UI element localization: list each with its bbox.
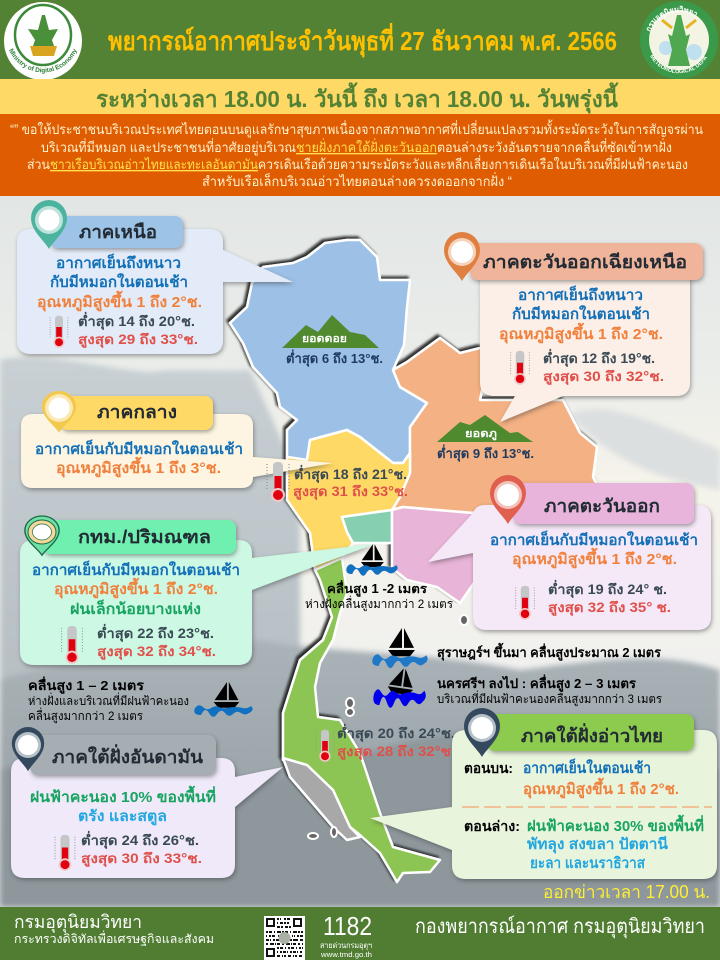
icon: pin Gulf xyxy=(464,708,500,757)
panel: north: สูงสุด 29 ถึง 33°ช. xyxy=(78,332,198,348)
logo: meteorological department xyxy=(640,1,718,79)
region: northeast xyxy=(392,338,597,513)
warning panel: ตอนล่างระวังอันตรายจากคลื่นที่ซัดเข้าหาฝั่ง xyxy=(437,138,672,155)
central temperatures xyxy=(267,462,408,502)
wave note: Surat xyxy=(372,628,661,668)
panel: northeast xyxy=(444,232,703,422)
icon: pin northeast xyxy=(444,232,480,281)
region: north xyxy=(230,240,427,463)
map of Thailand xyxy=(230,240,597,882)
south temperatures: สูงสุด 28 ถึง 32°ช. xyxy=(337,744,455,760)
icon: pin central xyxy=(42,391,76,433)
wave note: upper gulf xyxy=(305,544,454,612)
panel: northeast: อุณหภูมิสูงขึ้น 1 ถึง 2°ช. xyxy=(499,322,663,344)
panel: east: อุณหภูมิสูงขึ้น 1 ถึง 2°ช. xyxy=(512,547,677,569)
logo: meteorological department: กรมอุตุนิยมวิทยา xyxy=(646,6,697,32)
panel: east: ภาคตะวันออก xyxy=(544,496,660,516)
panel: Gulf coast: ตอนล่าง: xyxy=(464,818,520,834)
panel: central: ภาคกลาง xyxy=(97,402,177,422)
mountain: Phu peak xyxy=(437,415,534,462)
footer: สายด่วนกรมอุตุฯ xyxy=(320,941,372,950)
panel: Gulf coast: ภาคใต้ฝั่งอ่าวไทย xyxy=(521,723,663,746)
panel: Bangkok and vicinity: สูงสุด 32 ถึง 34°ช. xyxy=(97,644,216,660)
panel: north: ภาคเหนือ xyxy=(79,222,157,242)
mountain: Doi peak xyxy=(282,315,383,367)
region: Andaman coast xyxy=(283,758,360,840)
panel: Bangkok and vicinity: อากาศเย็นกับมีหมอกในตอนเช้า xyxy=(32,560,240,579)
background: misty mountains xyxy=(0,195,720,907)
footer: กระทรวงดิจิทัลเพื่อเศรษฐกิจและสังคม xyxy=(14,930,214,946)
wave note: Nakhon Si Thammarat: นครศรีฯ ลงไป : คลื่นสูง 2 – 3 เมตร xyxy=(437,674,636,692)
panel: east: ต่ำสุด 19 ถึง 24° ช. xyxy=(548,579,667,598)
wave note: upper gulf: ห่างฝั่งคลื่นสูงมากกว่า 2 เมตร xyxy=(305,595,454,612)
warning panel: บริเวณที่มีหมอก และประชาชนที่อาศัยอยู่บริเวณ xyxy=(41,138,296,156)
mountain: Doi peak: ยอดดอย xyxy=(302,333,347,345)
panel: northeast: กับมีหมอกในตอนเช้า xyxy=(512,305,650,323)
mountain: Phu peak: ต่ำสุด 9 ถึง 13°ช. xyxy=(437,444,534,462)
panel: Gulf coast: อุณหภูมิสูงขึ้น 1 ถึง 2°ช. xyxy=(523,777,679,799)
panel: north: ต่ำสุด 14 ถึง 20°ช. xyxy=(78,311,195,330)
region: south xyxy=(283,558,440,882)
wave note: west coast: ห่างฝั่งและบริเวณที่มีฝนฟ้าคะนอง xyxy=(28,692,189,708)
panel: Gulf coast: อากาศเย็นในตอนเช้า xyxy=(523,758,651,777)
panel: north xyxy=(17,200,293,354)
central temperatures: ต่ำสุด 18 ถึง 21°ช. xyxy=(294,464,407,483)
panel: Andaman coast: ต่ำสุด 24 ถึง 26°ช. xyxy=(81,830,199,849)
panel: Bangkok and vicinity xyxy=(20,516,374,665)
panel: northeast: สูงสุด 30 ถึง 32°ช. xyxy=(543,369,664,385)
panel: Bangkok and vicinity: กทม./ปริมณฑล xyxy=(78,527,211,547)
panel: Gulf coast: ยะลา และนราธิวาส xyxy=(530,854,646,872)
header bar xyxy=(0,0,720,79)
wave note: upper gulf: คลื่นสูง 1 -2 เมตร xyxy=(327,580,427,597)
mountain: Doi peak: ต่ำสุด 6 ถึง 13°ช. xyxy=(286,349,383,367)
subtitle strip: ระหว่างเวลา 18.00 น. วันนี้ ถึง เวลา 18.00 น. วันพรุ่งนี้ xyxy=(96,82,619,114)
icon: pin Bangkok xyxy=(25,516,59,555)
panel: north: กับมีหมอกในตอนเช้า xyxy=(50,273,188,291)
panel: Gulf coast: ฝนฟ้าคะนอง 30% ของพื้นที่ xyxy=(527,814,704,835)
panel: north: อุณหภูมิสูงขึ้น 1 ถึง 2°ช. xyxy=(37,290,202,312)
panel: Andaman coast: สูงสุด 30 ถึง 33°ช. xyxy=(81,851,202,867)
panel: Andaman coast: ตรัง และสตูล xyxy=(78,808,167,826)
warning panel: สำหรับเรือเล็กบริเวณอ่าวไทยตอนล่างควรงดออกจากฝั่ง “ xyxy=(202,172,512,189)
panel: east: อากาศเย็นกับมีหมอกในตอนเช้า xyxy=(490,530,698,549)
warning panel xyxy=(0,114,720,196)
panel: Andaman coast: ฝนฟ้าคะนอง 10% ของพื้นที่ xyxy=(30,785,216,806)
panel: north: อากาศเย็นถึงหนาว xyxy=(56,253,181,272)
wave note: west coast xyxy=(28,676,253,724)
panel: Gulf coast: ตอนบน: xyxy=(464,760,513,776)
region: east xyxy=(392,507,490,603)
footer: 1182 xyxy=(323,911,372,941)
icon: pin east xyxy=(490,475,526,524)
wave note: west coast: คลื่นสูงมากกว่า 2 เมตร xyxy=(28,707,144,724)
panel: east xyxy=(428,475,711,630)
subtitle strip xyxy=(0,79,720,114)
panel: Andaman coast xyxy=(11,727,283,878)
panel: east: สูงสุด 32 ถึง 35° ช. xyxy=(548,600,671,616)
issue time: ออกข่าวเวลา 17.00 น. xyxy=(543,882,710,902)
footer xyxy=(0,907,720,960)
islands xyxy=(308,615,468,839)
south temperatures xyxy=(316,723,455,762)
panel: central: อากาศเย็นกับมีหมอกในตอนเช้า xyxy=(35,439,243,458)
panel: northeast: ภาคตะวันออกเฉียงเหนือ xyxy=(483,252,687,272)
panel: Gulf coast: พัทลุง สงขลา ปัตตานี xyxy=(527,836,669,854)
icon: pin north xyxy=(31,200,67,249)
wave note: Nakhon Si Thammarat: บริเวณที่มีฝนฟ้าคะนองคลื่นสูงมากกว่า 3 เมตร xyxy=(437,690,663,707)
footer: กรมอุตุนิยมวิทยา xyxy=(14,912,142,933)
warning panel: ชาวเรือบริเวณอ่าวไทยและทะเลอันดามัน xyxy=(50,157,258,172)
central temperatures: สูงสุด 31 ถึง 33°ช. xyxy=(293,484,408,500)
panel: Bangkok and vicinity: ฝนเล็กน้อยบางแห่ง xyxy=(70,599,201,618)
wave note: Nakhon Si Thammarat xyxy=(373,667,663,708)
icon: pin Andaman xyxy=(12,727,44,771)
panel: northeast: อากาศเย็นถึงหนาว xyxy=(518,285,643,304)
warning panel: ส่วน xyxy=(27,157,50,172)
panel: Bangkok and vicinity: อุณหภูมิสูงขึ้น 1 ถึง 2°ช. xyxy=(54,577,218,599)
panel: Bangkok and vicinity: ต่ำสุด 22 ถึง 23°ช. xyxy=(97,623,214,642)
wave note: west coast: คลื่นสูง 1 – 2 เมตร xyxy=(28,676,144,694)
panel: Andaman coast: ภาคใต้ฝั่งอันดามัน xyxy=(52,744,204,767)
title: พยากรณ์อากาศประจำวันพุธที่ 27 ธันวาคม พ.ศ. 2566 xyxy=(108,22,617,58)
region: Bangkok and vicinity xyxy=(342,510,392,543)
warning panel: ควรเดินเรือด้วยความระมัดระวังและหลีกเลี่ยงการเดินเรือในบริเวณที่มีฝนฟ้าคะนอง xyxy=(258,155,688,172)
wave note: Surat: สุราษฎร์ฯ ขึ้นมา คลื่นสูงประมาณ 2 เมตร xyxy=(437,642,661,661)
panel: central: อุณหภูมิสูงขึ้น 1 ถึง 3°ช. xyxy=(56,456,221,478)
panel: central xyxy=(21,391,333,488)
panel: Gulf coast xyxy=(370,708,717,879)
warning panel: ชายฝั่งภาคใต้ฝั่งตะวันออก xyxy=(296,138,437,155)
panel: northeast: ต่ำสุด 12 ถึง 19°ช. xyxy=(543,348,655,367)
icon: QR code xyxy=(264,916,305,960)
footer: www.tmd.go.th xyxy=(320,950,372,959)
mountain: Phu peak: ยอดภู xyxy=(465,428,497,441)
region: central xyxy=(287,430,410,570)
south temperatures: ต่ำสุด 20 ถึง 24°ช. xyxy=(337,723,455,742)
